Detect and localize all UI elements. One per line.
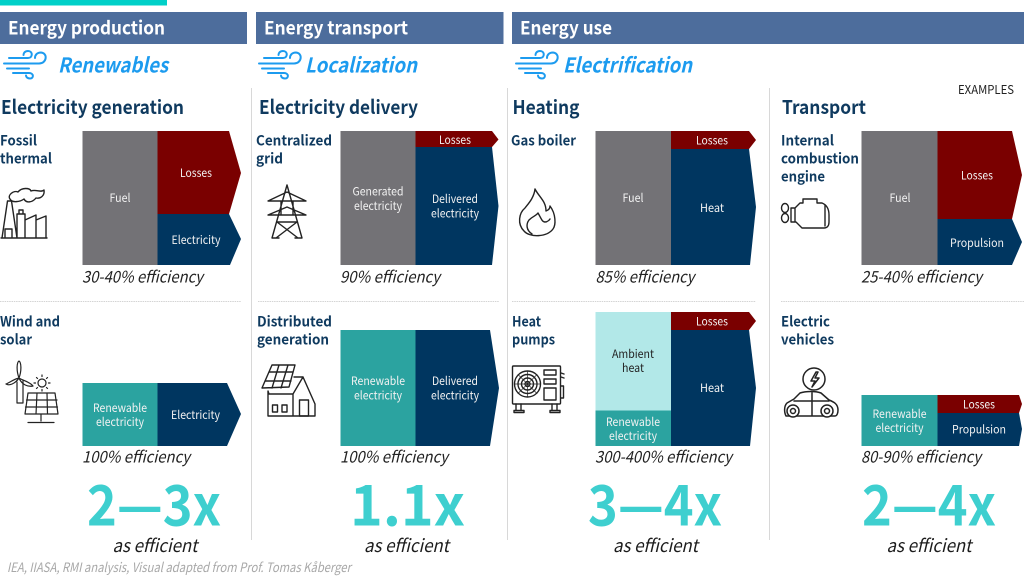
label: Electric vehicles: vehicles [781,330,834,350]
label: Internal combustion engine: engine [781,166,825,186]
chart: wind and solar: electricity [96,414,144,430]
header: Energy use: Energy use [520,14,612,40]
chart: electric vehicles: electricity [876,420,924,436]
label: Internal combustion engine: combustion [781,148,859,168]
label: Wind and solar: solar [0,330,33,350]
stat note: as efficient [886,532,974,558]
chart: heat pumps: Renewable [606,414,660,430]
icon: wind, transport [259,51,301,78]
icon: heat pump unit [512,366,564,412]
icon: flame [520,189,555,236]
caption: 100% efficiency: 100% efficiency [82,444,192,468]
caption: 300-400% efficiency: 300-400% efficiency [595,444,734,468]
header: Energy transport: Energy transport [264,14,408,40]
chart: heat pumps: heat [622,360,645,376]
label: Centralized grid: grid [256,148,283,168]
heading: Electricity generation: Electricity generation [1,93,184,120]
chart: electric vehicles: Losses [963,396,995,412]
stat: 2-3x: 2—3x [87,462,221,542]
label: Heat pumps: pumps [512,330,555,350]
label: Fossil thermal [0,130,53,168]
icon: wind, production [4,51,46,78]
chart: wind and solar: Electricity [171,407,220,423]
chart: distributed generation: Renewable [351,373,405,389]
label: Centralized grid: Centralized [256,130,332,150]
caption: 25-40% efficiency: 25-40% efficiency [861,264,984,288]
chart: gas boiler: Heat [700,200,725,216]
label: examples: EXAMPLES [958,81,1014,98]
stat note: as efficient [364,532,451,558]
chart: gas boiler: Fuel [622,190,644,206]
chart: heat pumps: Heat [700,380,725,396]
subheading: Localization: Localization [305,48,419,78]
icon: factory [1,188,47,238]
chart: centralized grid: Delivered [432,191,478,207]
chart: centralized grid [340,131,498,265]
caption: 80-90% efficiency: 80-90% efficiency [861,444,983,468]
chart: centralized grid: electricity [354,198,402,214]
header: Energy production: Energy production [8,14,165,40]
label: Fossil thermal: thermal [0,148,53,168]
header: Energy production [0,12,247,44]
heading: Heating: Heating [512,93,580,120]
chart: wind and solar [82,383,241,446]
subheading: Electrification: Electrification [563,48,694,78]
icon: house with solar panels [262,365,315,416]
chart: heat pumps: Ambient [612,346,655,362]
chart: wind and solar: Renewable [93,400,147,416]
stat note: as efficient [112,532,200,558]
chart: distributed generation: Delivered [432,373,478,389]
header: Energy transport [256,12,504,44]
chart: centralized grid: Losses [439,132,471,148]
chart: electric vehicles: Propulsion [952,422,1006,438]
chart: heat pumps: Losses [696,314,728,330]
label: Gas boiler: Gas boiler [511,130,577,150]
heading: Transport: Transport [782,93,866,120]
chart: distributed generation: electricity [354,388,402,404]
chart: distributed generation [340,330,499,446]
icon: engine [782,199,829,228]
subheading: Renewables: Renewables [58,48,170,78]
chart: heat pumps [596,312,756,446]
chart: internal combustion engine [862,131,1022,265]
label: Wind and solar: Wind and [0,312,60,332]
label: Centralized grid [256,130,332,168]
caption: 85% efficiency: 85% efficiency [596,264,697,288]
label: Fossil thermal: Fossil [0,130,38,150]
chart: centralized grid: electricity [431,206,479,222]
label: Heat pumps: Heat [512,312,541,332]
chart: gas boiler: Losses [696,132,728,148]
label: Internal combustion engine [781,130,859,186]
chart: distributed generation: electricity [431,388,479,404]
label: Distributed generation [257,312,332,350]
stat: 1.1x: 1.1x [350,462,465,542]
caption: 30-40% efficiency: 30-40% efficiency [82,264,205,288]
chart: fossil thermal [82,131,241,265]
icon: wind turbine and solar panel [6,361,58,422]
icon: wind, use [516,51,558,78]
stat: 3-4x: 3—4x [588,462,722,542]
label: Electric vehicles [781,312,834,350]
label: Wind and solar [0,312,60,350]
label: Heat pumps [512,312,555,350]
stat note: as efficient [613,532,700,558]
chart: centralized grid: Generated [352,184,404,200]
icon: electric car [785,368,838,417]
chart: heat pumps: electricity [609,428,657,444]
caption: 90% efficiency: 90% efficiency [340,264,442,288]
chart: fossil thermal: Electricity [172,232,221,248]
chart: gas boiler [596,131,756,265]
source note: IEA, IIASA, RMI analysis, Visual adapted from Prof. Tomas Kåberger [7,557,353,576]
chart: internal combustion engine: Losses [961,168,993,184]
stat: 2-4x: 2—4x [862,462,996,542]
chart: internal combustion engine: Fuel [890,190,910,206]
heading: Electricity delivery: Electricity delivery [259,93,418,120]
chart: electric vehicles [862,395,1022,446]
icon: transmission tower [268,185,306,238]
chart: fossil thermal: Losses [180,165,212,181]
caption: 100% efficiency: 100% efficiency [340,444,450,468]
chart: electric vehicles: Renewable [872,406,926,422]
label: Distributed generation: generation [257,330,329,350]
label: Internal combustion engine: Internal [781,130,835,150]
label: Electric vehicles: Electric [781,312,830,332]
header: Energy use [512,12,1024,44]
label: Distributed generation: Distributed [257,312,332,332]
chart: fossil thermal: Fuel [110,190,130,206]
chart: internal combustion engine: Propulsion [950,235,1004,251]
